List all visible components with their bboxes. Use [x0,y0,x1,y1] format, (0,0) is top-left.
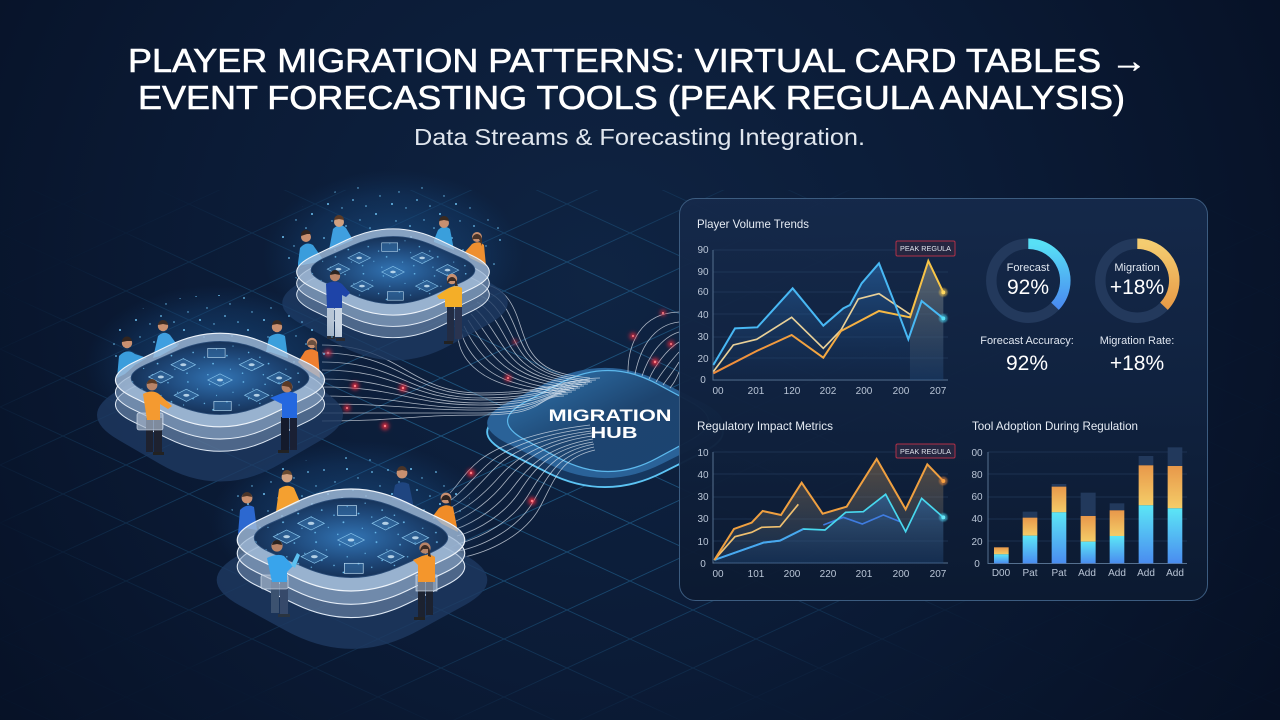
bar chart: tool adoption during regulation: Add [1108,568,1126,579]
line chart: player volume trends: 30 [697,332,709,343]
bar chart: tool adoption during regulation: Add [1078,568,1096,579]
bar chart: tool adoption during regulation [971,419,1187,579]
line chart: player volume trends: 202 [820,386,837,397]
line chart: player volume trends: 00 [712,386,724,397]
line chart: player volume trends: 40 [697,310,709,321]
hub label [548,406,672,442]
line chart: regulatory impact metrics: 0 [700,559,706,570]
donut: forecast: 92% [1007,276,1049,299]
line chart: regulatory impact metrics: 101 [748,569,765,580]
card table group 1 (top) [263,170,523,360]
metric: forecast accuracy: Forecast Accuracy: [980,335,1074,347]
metric: migration rate: +18% [1110,352,1164,375]
bar chart: tool adoption during regulation: 80 [971,470,983,481]
metric: migration rate: Migration Rate: [1100,335,1174,347]
line chart: player volume trends: 0 [700,375,706,386]
chart heading: Player Volume Trends [697,217,809,231]
line chart: player volume trends: 201 [748,386,765,397]
back players [298,215,486,266]
donut: migration: Migration [1114,262,1160,274]
metric: forecast accuracy [980,335,1074,375]
bar chart: tool adoption during regulation: Pat [1051,568,1067,579]
front players [137,379,297,455]
hub label: MIGRATION [548,406,672,425]
bar chart: tool adoption during regulation: D00 [992,568,1011,579]
bar chart: tool adoption during regulation: 40 [971,514,983,525]
donut: forecast: Forecast [1007,262,1049,274]
line chart: regulatory impact metrics [697,419,955,580]
bar chart: tool adoption during regulation: Add [1166,568,1184,579]
line chart: regulatory impact metrics: 10 [697,537,709,548]
peak regula tag [896,444,955,458]
bar chart: tool adoption during regulation: 60 [971,492,983,503]
line chart: regulatory impact metrics: 30 [697,492,709,503]
line chart: player volume trends: 20 [697,354,709,365]
data streams: table 2 to hub [322,345,600,421]
line chart: regulatory impact metrics: 30 [697,514,709,525]
bar chart: tool adoption during regulation: Pat [1022,568,1038,579]
line chart: regulatory impact metrics: 207 [930,569,947,580]
hub label: HUB [590,425,638,442]
line chart: player volume trends: 207 [930,386,947,397]
line chart: regulatory impact metrics: 10 [697,448,709,459]
back players [238,466,458,534]
migration hub [487,368,723,487]
bar chart: tool adoption during regulation: Add [1137,568,1155,579]
line chart: regulatory impact metrics: 200 [784,569,801,580]
line chart: regulatory impact metrics: 220 [820,569,837,580]
back players [117,320,320,378]
bar chart: tool adoption during regulation: 00 [971,448,983,459]
metric: migration rate [1100,335,1174,375]
donut: migration: +18% [1110,276,1164,299]
line chart: player volume trends: 90 [697,267,709,278]
line chart: player volume trends: 90 [697,245,709,256]
line chart: player volume trends: 200 [856,386,873,397]
line chart: regulatory impact metrics: 00 [712,569,724,580]
line chart: player volume trends: 200 [893,386,910,397]
bar chart: tool adoption during regulation: 20 [971,537,983,548]
data streams: hub to dashboard [628,312,679,388]
data streams: table 1 to hub [458,285,590,394]
title: EVENT FORECASTING TOOLS (PEAK REGULA ANALYSIS) [138,79,1125,116]
front players [326,270,462,344]
subtitle: Data Streams & Forecasting Integration. [414,124,865,150]
panel: analytics dashboard [680,198,1208,600]
line chart: regulatory impact metrics: 40 [697,470,709,481]
data streams: table 3 to hub [450,425,595,558]
line chart: regulatory impact metrics: 200 [893,569,910,580]
peak regula tag: PEAK REGULA [900,244,951,253]
chart heading: Tool Adoption During Regulation [972,419,1138,433]
line chart: player volume trends: 120 [784,386,801,397]
card table group 3 (bottom) [211,440,491,649]
metric: forecast accuracy: 92% [1006,352,1048,375]
front players [261,540,437,620]
red data pulses [324,310,674,504]
donut: migration [1100,244,1174,318]
line chart: regulatory impact metrics: 201 [856,569,873,580]
card table group 2 (left) [85,285,355,482]
line chart: player volume trends: 60 [697,287,709,298]
title: PLAYER MIGRATION PATTERNS: VIRTUAL CARD TABLES → [128,42,1147,79]
title [128,42,1147,116]
bar chart: tool adoption during regulation: 0 [974,559,980,570]
peak regula tag: PEAK REGULA [900,447,951,456]
donut: forecast [991,244,1065,318]
chart heading: Regulatory Impact Metrics [697,419,833,433]
line chart: player volume trends [697,217,955,397]
peak regula tag [896,241,955,256]
